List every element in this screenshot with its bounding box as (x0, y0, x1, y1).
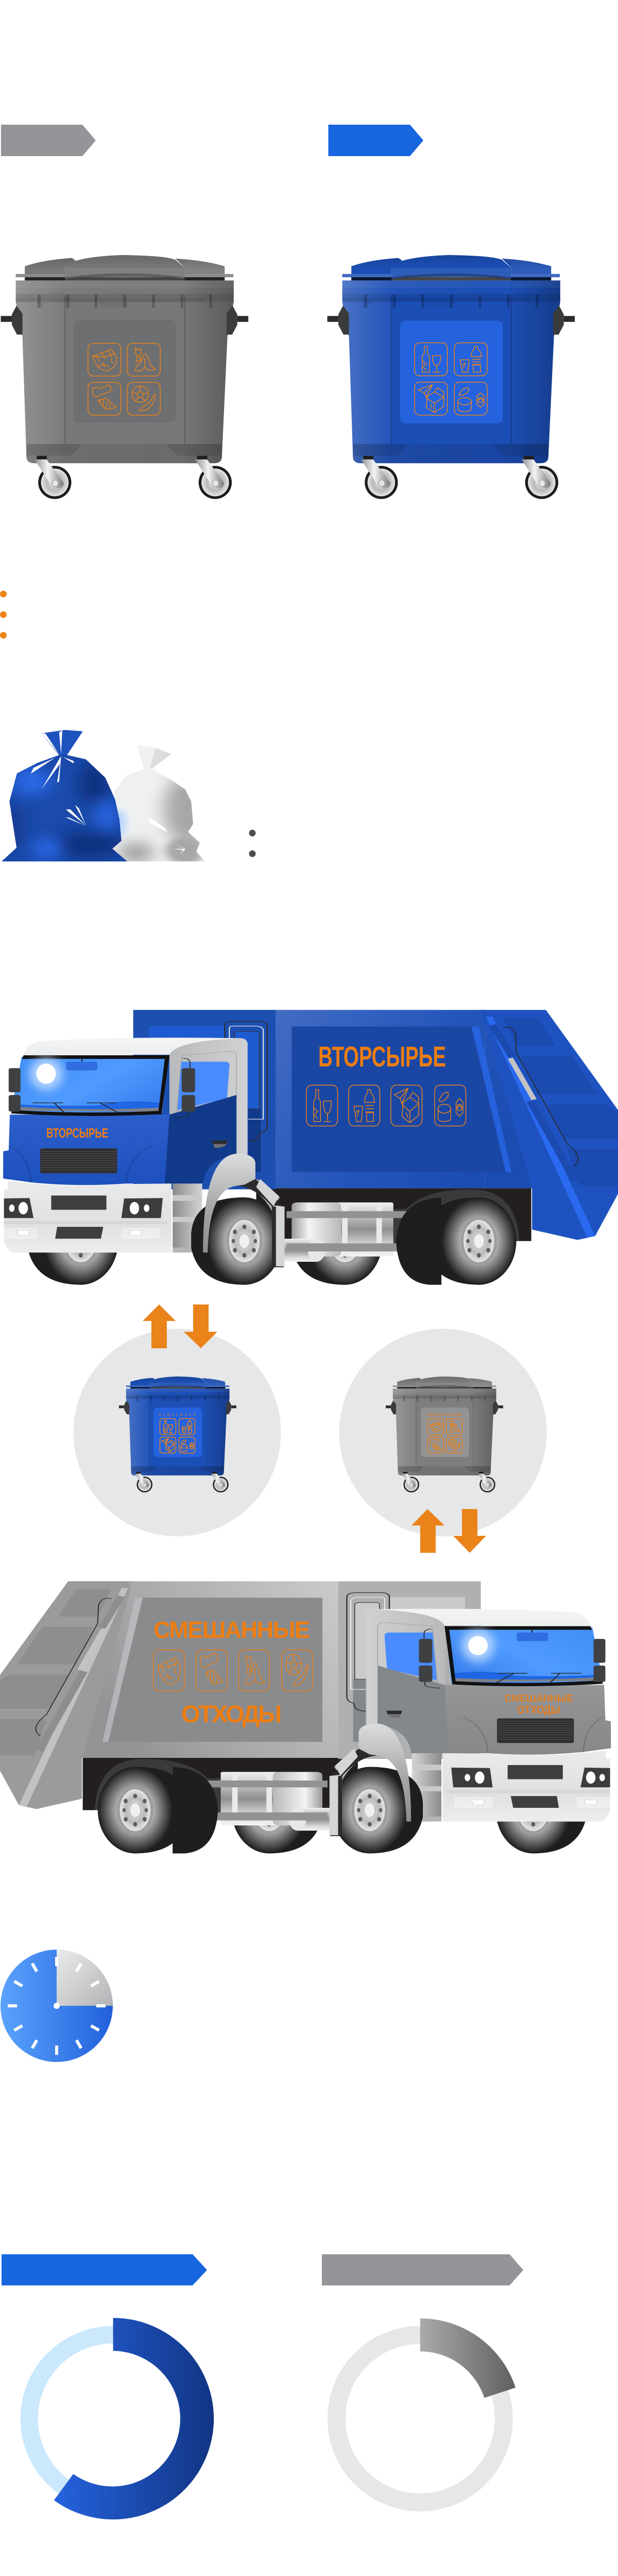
blue recycling garbage truck (3, 1010, 618, 1285)
tag: mixed waste chart header (322, 2255, 523, 2285)
small blue sticker caption: ВТОРСЫРЬЕ (159, 1414, 196, 1417)
donut chart: recyclables 60% (29, 2318, 214, 2519)
donut track (336, 2335, 504, 2502)
arrows: blue truck and container (143, 1304, 217, 1348)
grey mixed-waste garbage truck (0, 1581, 611, 1853)
blue recyclables container (328, 255, 575, 499)
truck side label line 2: ОТХОДЫ (181, 1700, 282, 1727)
tag: recyclables chart header (2, 2255, 207, 2285)
small grey container (386, 1377, 503, 1493)
orange bullet list (0, 590, 7, 639)
donut chart: mixed waste 20% (336, 2318, 516, 2502)
truck side icons (306, 1085, 466, 1126)
circle behind small blue container (73, 1329, 281, 1536)
windshield glare (30, 1057, 63, 1090)
truck side label: ВТОРСЫРЬЕ (318, 1040, 446, 1073)
small grey icons (427, 1418, 462, 1453)
donut value arc (54, 2318, 214, 2519)
truck side label line 1: СМЕШАННЫЕ (153, 1617, 310, 1643)
small grey sticker (421, 1408, 469, 1457)
truck cab label line 1: СМЕШАННЫЕ (505, 1693, 573, 1704)
dark bullet list (249, 829, 255, 857)
icon: clock 45 minutes (1, 1950, 113, 2062)
donut track (29, 2335, 197, 2503)
small grey sticker caption: СМЕШАННЫЕ ОТХОДЫ (426, 1414, 462, 1417)
sticker panel on grey container (74, 320, 176, 422)
icon grid: mixed waste (88, 344, 160, 415)
small blue container (119, 1377, 236, 1493)
truck cab label line 2: ОТХОДЫ (517, 1703, 560, 1716)
circle behind small grey container (339, 1329, 547, 1536)
white bag (112, 745, 205, 861)
donut value arc (420, 2318, 516, 2398)
icon grid: recyclables (415, 343, 487, 415)
grey mixed-waste container (1, 255, 248, 499)
small blue icons (160, 1418, 195, 1453)
icon: garbage bags (0, 728, 215, 865)
small blue sticker (153, 1408, 202, 1457)
arrows: grey truck and container (411, 1509, 486, 1553)
blue bag (0, 728, 130, 865)
sticker panel on blue container (400, 320, 503, 423)
truck cab label: ВТОРСЫРЬЕ (46, 1125, 108, 1141)
windshield glare (461, 1629, 494, 1662)
tag: recyclables header (blue) (329, 125, 423, 156)
truck side icons (153, 1650, 313, 1691)
tag: mixed waste header (grey) (1, 125, 96, 156)
